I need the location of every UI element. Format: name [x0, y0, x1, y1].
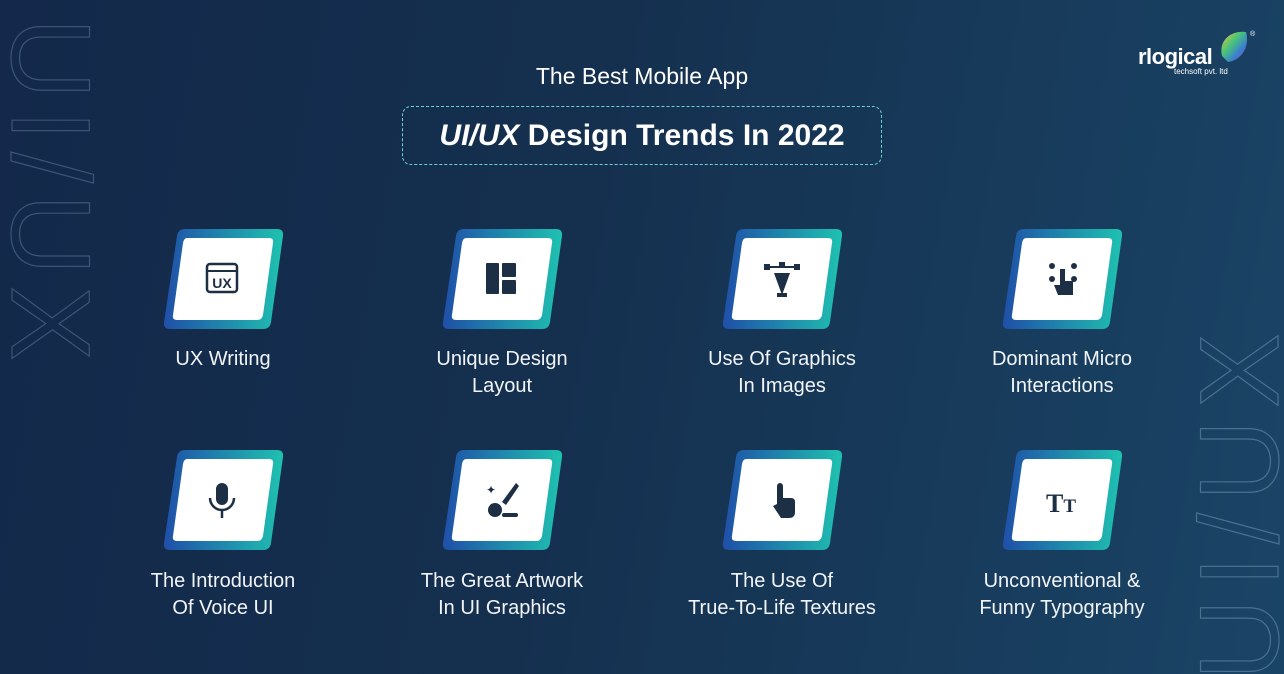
label 2: Unique Design [436, 348, 568, 370]
card 6: ✦ [486, 483, 496, 497]
logo [1138, 30, 1256, 76]
card 1 [164, 229, 283, 329]
label 5: The Introduction [151, 570, 295, 592]
label 2: Layout [472, 375, 532, 397]
logo: ® [1250, 30, 1256, 38]
label 3: Use Of Graphics [708, 348, 856, 370]
title box [402, 106, 882, 165]
card 5 [164, 450, 283, 550]
label 8: Unconventional & [984, 570, 1140, 592]
label 3: In Images [738, 375, 826, 397]
label 5: Of Voice UI [172, 597, 274, 619]
logo: techsoft pvt. ltd [1174, 67, 1228, 76]
label 7: The Use Of [731, 570, 833, 592]
card 1: UX [212, 275, 232, 291]
card 3 [722, 229, 842, 329]
card 7 [722, 450, 842, 550]
label 7: True-To-Life Textures [688, 597, 876, 619]
card 4 [1002, 229, 1122, 329]
label 4: Interactions [1010, 375, 1114, 397]
label 6: The Great Artwork [421, 570, 583, 592]
card 6 [442, 450, 562, 550]
label 8: Funny Typography [979, 597, 1145, 619]
card 8: TT [1046, 489, 1076, 518]
logo: rlogical [1138, 44, 1212, 69]
label 1: UX Writing [175, 348, 271, 370]
label 4: Dominant Micro [992, 348, 1132, 370]
label 2 [436, 348, 568, 397]
title: The Best Mobile App [536, 63, 748, 89]
label 8 [979, 570, 1145, 619]
label 6: In UI Graphics [438, 597, 566, 619]
label 7 [688, 570, 876, 619]
title box: UI/UX Design Trends In 2022 [439, 119, 845, 152]
label 5 [151, 570, 295, 619]
card 8 [1002, 450, 1122, 550]
label 3 [708, 348, 856, 397]
label 4 [992, 348, 1132, 397]
card 2 [442, 229, 562, 329]
label 6 [421, 570, 584, 619]
